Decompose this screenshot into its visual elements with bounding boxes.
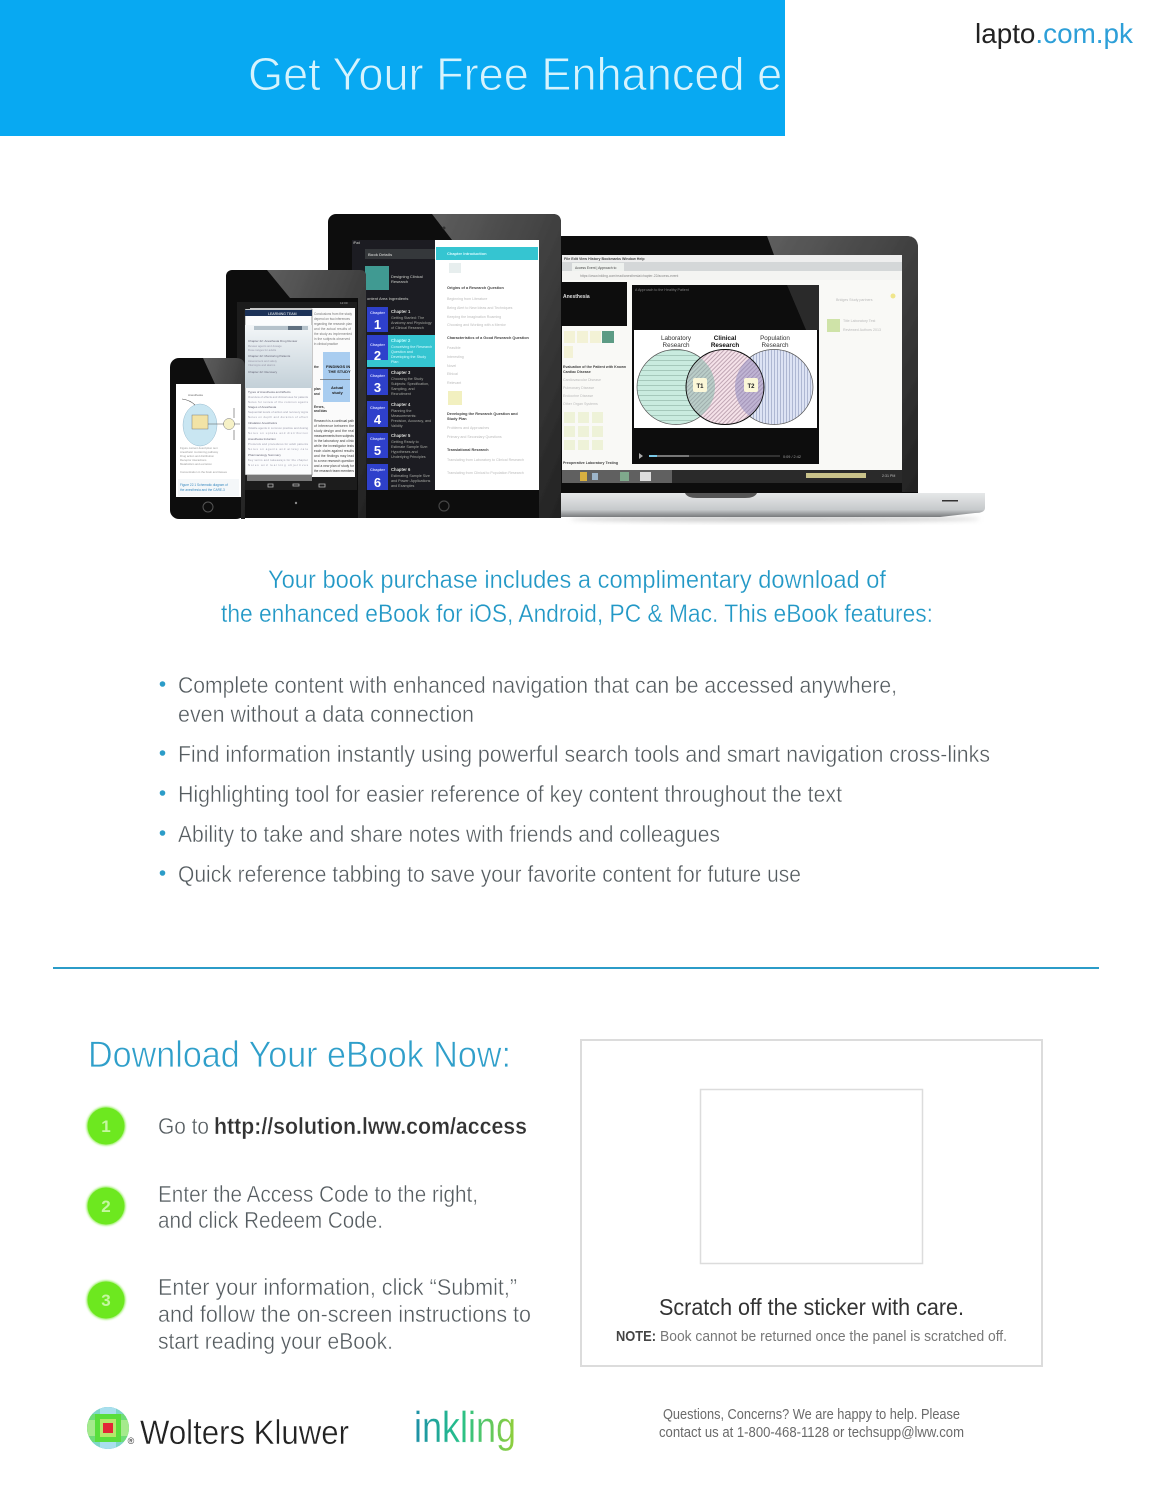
android page: THE STUDY xyxy=(328,369,351,374)
device: laptop: Pulmonary Disease xyxy=(563,386,594,390)
android page: and xyxy=(314,392,320,396)
device: laptop xyxy=(558,236,985,522)
device mockups xyxy=(170,214,985,522)
device: laptop: File Edit View History Bookmarks Window Help xyxy=(564,257,645,261)
iPad contents list: Origins of a Research Question xyxy=(447,286,504,290)
iPad sidebar: Chapter xyxy=(370,467,385,472)
iPad sidebar: and Power: Applications xyxy=(391,479,431,483)
device: laptop: Other Organ Systems xyxy=(563,402,598,406)
intro text: the enhanced eBook for iOS, Android, PC & Mac. This eBook features: xyxy=(221,600,933,628)
video player: A Approach to the Healthy Patient xyxy=(635,288,689,292)
iPad sidebar xyxy=(365,249,435,490)
device: laptop: Access Event | Approach to xyxy=(575,266,617,270)
android overlay panel: Chapter 22: Monitoring Patients xyxy=(248,354,291,358)
device: iPhone xyxy=(170,358,245,519)
iPad sidebar: 5 xyxy=(374,443,381,458)
step 1: 1 xyxy=(101,1117,111,1136)
video player: 0:09 / 2:42 xyxy=(783,455,801,459)
android page: Errors, xyxy=(314,405,325,409)
step 2 xyxy=(86,1181,478,1233)
android page: study design and the real xyxy=(314,429,354,433)
phone diagram xyxy=(182,393,240,446)
android page: each claim against results xyxy=(314,449,354,453)
iPad sidebar: Chapter 2 xyxy=(391,338,411,343)
android page: while the investigator tests xyxy=(314,444,354,448)
android overlay panel: Protocols and procedures for adult patients xyxy=(248,442,309,446)
iPad contents list: Primary and Secondary Questions xyxy=(447,435,502,439)
iPad sidebar: Validity xyxy=(391,424,403,428)
phone diagram: Anesthesia xyxy=(188,393,203,397)
android page: and a new plan of study for xyxy=(314,464,355,468)
venn diagram xyxy=(637,335,813,424)
feature list: Ability to take and share notes with friends and colleagues xyxy=(178,821,720,847)
android overlay panel: Notes on depth and duration of effect xyxy=(248,415,308,419)
iPad contents list: Beginning from Literature xyxy=(447,297,487,301)
step 3: and follow the on-screen instructions to xyxy=(158,1301,531,1327)
iPad sidebar: Research xyxy=(391,279,408,284)
android page: Conclusions from the study xyxy=(314,312,352,316)
device: laptop: https://www.inkling.com/read/anesthesia/chapter-22/access-event xyxy=(580,274,678,278)
device: iPad xyxy=(328,214,561,518)
iPad sidebar: 1 xyxy=(374,317,381,332)
android overlay panel: Anesthesia Induction xyxy=(248,437,276,441)
device: laptop: 2:31 PM xyxy=(882,474,895,478)
android overlay panel: Stages of Anesthesia xyxy=(248,405,277,409)
android overlay panel: Inhalation Anesthetics xyxy=(248,421,278,425)
feature list: Quick reference tabbing to save your favorite content for future use xyxy=(178,861,801,887)
iPad sidebar: 4 xyxy=(374,412,382,427)
android overlay panel: Notes on uptake and distribution xyxy=(248,431,308,435)
android overlay panel: Chapter 22: Recovery xyxy=(248,370,278,374)
venn diagram: T2 xyxy=(747,384,755,390)
iPad contents list: Keeping the Imagination Roaming xyxy=(447,315,501,319)
android overlay panel: Notes for review of the common agents xyxy=(248,400,309,404)
scratch instruction: Scratch off the sticker with care. xyxy=(659,1294,964,1320)
iPad contents list: Novel xyxy=(447,364,456,368)
iPad sidebar: Underlying Principles xyxy=(391,455,426,459)
android overlay panel: Vital signs and alarms xyxy=(248,363,276,367)
step 3: 3 xyxy=(101,1291,111,1310)
iPad sidebar: Estimate Sample Size: xyxy=(391,445,428,449)
device: laptop: Title Laboratory Test xyxy=(843,319,875,323)
step 1: Go to xyxy=(158,1113,209,1139)
venn diagram: Population xyxy=(760,335,790,342)
device: laptop: Cardiac Disease xyxy=(563,370,591,374)
android overlay panel xyxy=(245,309,312,475)
device: laptop: Reviewed Authors 2013 xyxy=(843,328,881,332)
android overlay panel: Pharmacology Summary xyxy=(248,453,281,457)
android page: to a new research question xyxy=(314,459,354,463)
device: laptop: Cardiovascular Disease xyxy=(563,378,601,382)
iPad sidebar: 3 xyxy=(374,380,381,395)
banner title: Get Your Free Enhanced eBook xyxy=(248,48,886,100)
device: iPhone: Figure content description text xyxy=(180,446,218,450)
iPad contents list: Translating from Clinical to Population Research xyxy=(447,471,524,475)
iPad sidebar: Getting Started: The xyxy=(391,316,424,320)
iPad sidebar: Book Details xyxy=(368,252,393,257)
iPad contents list: Relevant xyxy=(447,381,461,385)
step 2: and click Redeem Code. xyxy=(158,1207,383,1233)
header banner xyxy=(0,0,785,136)
return note: NOTE: xyxy=(616,1328,656,1345)
iPad sidebar: Planning the xyxy=(391,409,412,413)
venn diagram: Clinical xyxy=(714,335,736,342)
device: laptop: Bridges Study partners xyxy=(836,298,873,302)
iPad sidebar: of Clinical Research xyxy=(391,326,424,330)
iPad contents list: Being Alert to New Ideas and Techniques xyxy=(447,306,513,310)
device: iPhone: Metabolism and excretion xyxy=(180,462,212,466)
intro text: Your book purchase includes a complimentary download of xyxy=(268,566,886,594)
venn diagram: Laboratory xyxy=(661,335,692,342)
iPad contents list: Problems and Approaches xyxy=(447,426,489,430)
contact text: contact us at 1-800-468-1128 or techsupp@lww.com xyxy=(659,1425,964,1441)
logo: Wolters Kluwer: Wolters Kluwer xyxy=(140,1414,349,1452)
iPad contents list: Characteristics of a Good Research Question xyxy=(447,336,530,340)
android page: regarding the research plan xyxy=(314,322,352,326)
android page: the research team members xyxy=(314,469,354,473)
step 3: start reading your eBook. xyxy=(158,1328,393,1354)
android page: in the laboratory and clinic xyxy=(314,439,354,443)
iPad sidebar: Anatomy and Physiology xyxy=(391,321,432,325)
iPad sidebar: and Examples xyxy=(391,484,415,488)
iPad sidebar: Designing Clinical xyxy=(391,274,423,279)
iPad sidebar: ontent Area Ingredients xyxy=(367,296,408,301)
iPad sidebar: Chapter xyxy=(370,436,385,441)
iPad sidebar: 2 xyxy=(374,348,381,363)
android overlay panel: Sequential levels of action and recovery signs xyxy=(248,410,309,414)
logo: Wolters Kluwer xyxy=(87,1407,349,1452)
iPad sidebar: Sampling, and xyxy=(391,387,415,391)
android page: FINDINGS IN xyxy=(326,364,350,369)
logo: inkling: inkling xyxy=(414,1403,516,1452)
iPad sidebar: Chapter 5 xyxy=(391,433,411,438)
iPad sidebar: Plan xyxy=(391,360,398,364)
iPad contents list: Translational Research xyxy=(447,448,489,452)
iPad sidebar: Recruitment xyxy=(391,392,411,396)
android page: in clinical practice xyxy=(314,342,338,346)
panel: access code xyxy=(581,1040,1042,1366)
iPad sidebar: Chapter xyxy=(370,405,385,410)
android overlay panel: Volatile agents in common practice and dosing xyxy=(248,426,308,430)
iPad sidebar: Chapter 3 xyxy=(391,370,411,375)
iPad sidebar: Developing the Study xyxy=(391,355,426,359)
android page: the xyxy=(314,365,319,369)
iPad contents list: Developing the Research Question and xyxy=(447,412,518,416)
iPad contents list xyxy=(436,247,538,475)
device: Android tablet xyxy=(226,270,366,518)
android page: plan xyxy=(314,387,321,391)
iPad sidebar: Hypotheses and xyxy=(391,450,418,454)
device: laptop: Evaluation of the Patient with Known xyxy=(563,365,626,369)
device: iPad: iPad xyxy=(353,241,360,245)
android overlay panel: LEARNING TEAM xyxy=(268,312,297,316)
iPad contents list: Interesting xyxy=(447,355,464,359)
device: iPhone: Anesthetic monitoring pathway xyxy=(180,450,219,454)
iPad sidebar: Estimating Sample Size xyxy=(391,474,430,478)
android page xyxy=(250,308,355,477)
logo: Wolters Kluwer: ® xyxy=(128,1436,135,1446)
device: iPhone: Figure 22.1 Schematic diagram of xyxy=(180,483,228,487)
step 2: 2 xyxy=(101,1197,111,1216)
android overlay panel: Notes on agents and airway care xyxy=(248,447,308,451)
iPad sidebar: Measurements: xyxy=(391,414,416,418)
feature list: Complete content with enhanced navigation that can be accessed anywhere, xyxy=(178,672,897,698)
venn diagram: Research xyxy=(711,342,739,349)
iPad sidebar: Chapter xyxy=(370,373,385,378)
device: iPhone: the anesthesia and the CARE-3 xyxy=(180,488,225,492)
iPad sidebar: Chapter 6 xyxy=(391,467,411,472)
android page: in the subjects observed xyxy=(314,337,350,341)
step 1 xyxy=(86,1106,527,1146)
android overlay panel: Key terms and takeaways for the chapter xyxy=(248,458,308,462)
android page: and the actual results of xyxy=(314,327,351,331)
device: Android tablet: 12:00 xyxy=(340,301,348,305)
android overlay panel: Review agents and dosage xyxy=(248,344,282,348)
iPad sidebar: Chapter xyxy=(370,342,385,347)
contact text: Questions, Concerns? We are happy to help. Please xyxy=(663,1407,960,1423)
iPad sidebar: Question and xyxy=(391,350,413,354)
android page: of inference between the xyxy=(314,424,354,428)
step 1: http://solution.lww.com/access xyxy=(214,1113,527,1139)
android page: depend on two inferences xyxy=(314,317,350,321)
android page: and bias xyxy=(314,409,327,413)
iPad sidebar: Chapter 1 xyxy=(391,309,411,314)
feature list: Find information instantly using powerful search tools and smart navigation cross-links xyxy=(178,741,990,767)
feature list: Highlighting tool for easier reference of key content throughout the text xyxy=(178,781,843,807)
feature list xyxy=(160,672,990,887)
download heading: Download Your eBook Now: xyxy=(88,1034,511,1075)
device: laptop: Preoperative Laboratory Testing xyxy=(563,461,618,465)
iPad sidebar: Chapter 4 xyxy=(391,402,411,407)
android overlay panel: Types of Anesthesia and Effects xyxy=(248,390,291,394)
iPad contents list: Study Plan xyxy=(447,417,467,421)
device: laptop: Endocrine Disease xyxy=(563,394,593,398)
iPad sidebar: 6 xyxy=(374,475,381,490)
iPad sidebar: Choosing the Study xyxy=(391,377,423,381)
android page: study xyxy=(332,390,343,395)
iPad contents list: Choosing and Working with a Mentor xyxy=(447,323,507,327)
venn diagram: Research xyxy=(663,342,690,349)
iPad sidebar: Conceiving the Research xyxy=(391,345,432,349)
iPad contents list: Ethical xyxy=(447,372,458,376)
venn diagram: T1 xyxy=(696,384,704,390)
site logo: lapto.com.pk xyxy=(975,18,1134,49)
iPad sidebar: Chapter xyxy=(370,310,385,315)
venn diagram: Research xyxy=(762,342,789,349)
iPad sidebar: Precision, Accuracy, and xyxy=(391,419,431,423)
return note: Book cannot be returned once the panel is scratched off. xyxy=(660,1328,1007,1345)
step 3: Enter your information, click “Submit,” xyxy=(158,1274,517,1300)
android overlay panel: Dose ranges for adults xyxy=(248,348,277,352)
intro text xyxy=(221,566,933,628)
android overlay panel: Overview of effects and clinical uses for patients xyxy=(248,395,309,399)
globe icon xyxy=(87,1407,129,1449)
android page: measurements from subjects xyxy=(314,434,354,438)
android overlay panel: Notes and learning objectives xyxy=(248,463,309,467)
iPad contents list: Feasible xyxy=(447,346,461,350)
android overlay panel: Assessment and safety xyxy=(248,359,278,363)
android page: Research is a continual path xyxy=(314,419,354,423)
android page: the study as implemented xyxy=(314,332,352,336)
video player xyxy=(632,285,819,464)
device: iPhone: Concentration in the brain and tissues xyxy=(180,470,228,474)
contact text xyxy=(659,1407,964,1441)
device: laptop: Anesthesia xyxy=(563,294,590,300)
device: iPhone: Drug action and distribution xyxy=(180,454,214,458)
feature list: even without a data connection xyxy=(178,701,474,727)
step 2: Enter the Access Code to the right, xyxy=(158,1181,478,1207)
iPad contents list: Chapter Introduction xyxy=(447,251,487,256)
device: iPhone: Receptor interactions xyxy=(180,458,207,462)
android overlay panel: Chapter 22: Anesthesia Drug Review xyxy=(248,339,298,343)
iPad contents list: Translating from Laboratory to Clinical Research xyxy=(447,458,524,462)
android page: Actual xyxy=(331,385,343,390)
android nav buttons xyxy=(268,484,325,487)
scratch-off area xyxy=(700,1090,922,1264)
iPad sidebar: Subjects: Specification, xyxy=(391,382,429,386)
step 3 xyxy=(86,1274,531,1354)
android page: and the findings may lead xyxy=(314,454,354,458)
iPad sidebar: Getting Ready to xyxy=(391,440,419,444)
